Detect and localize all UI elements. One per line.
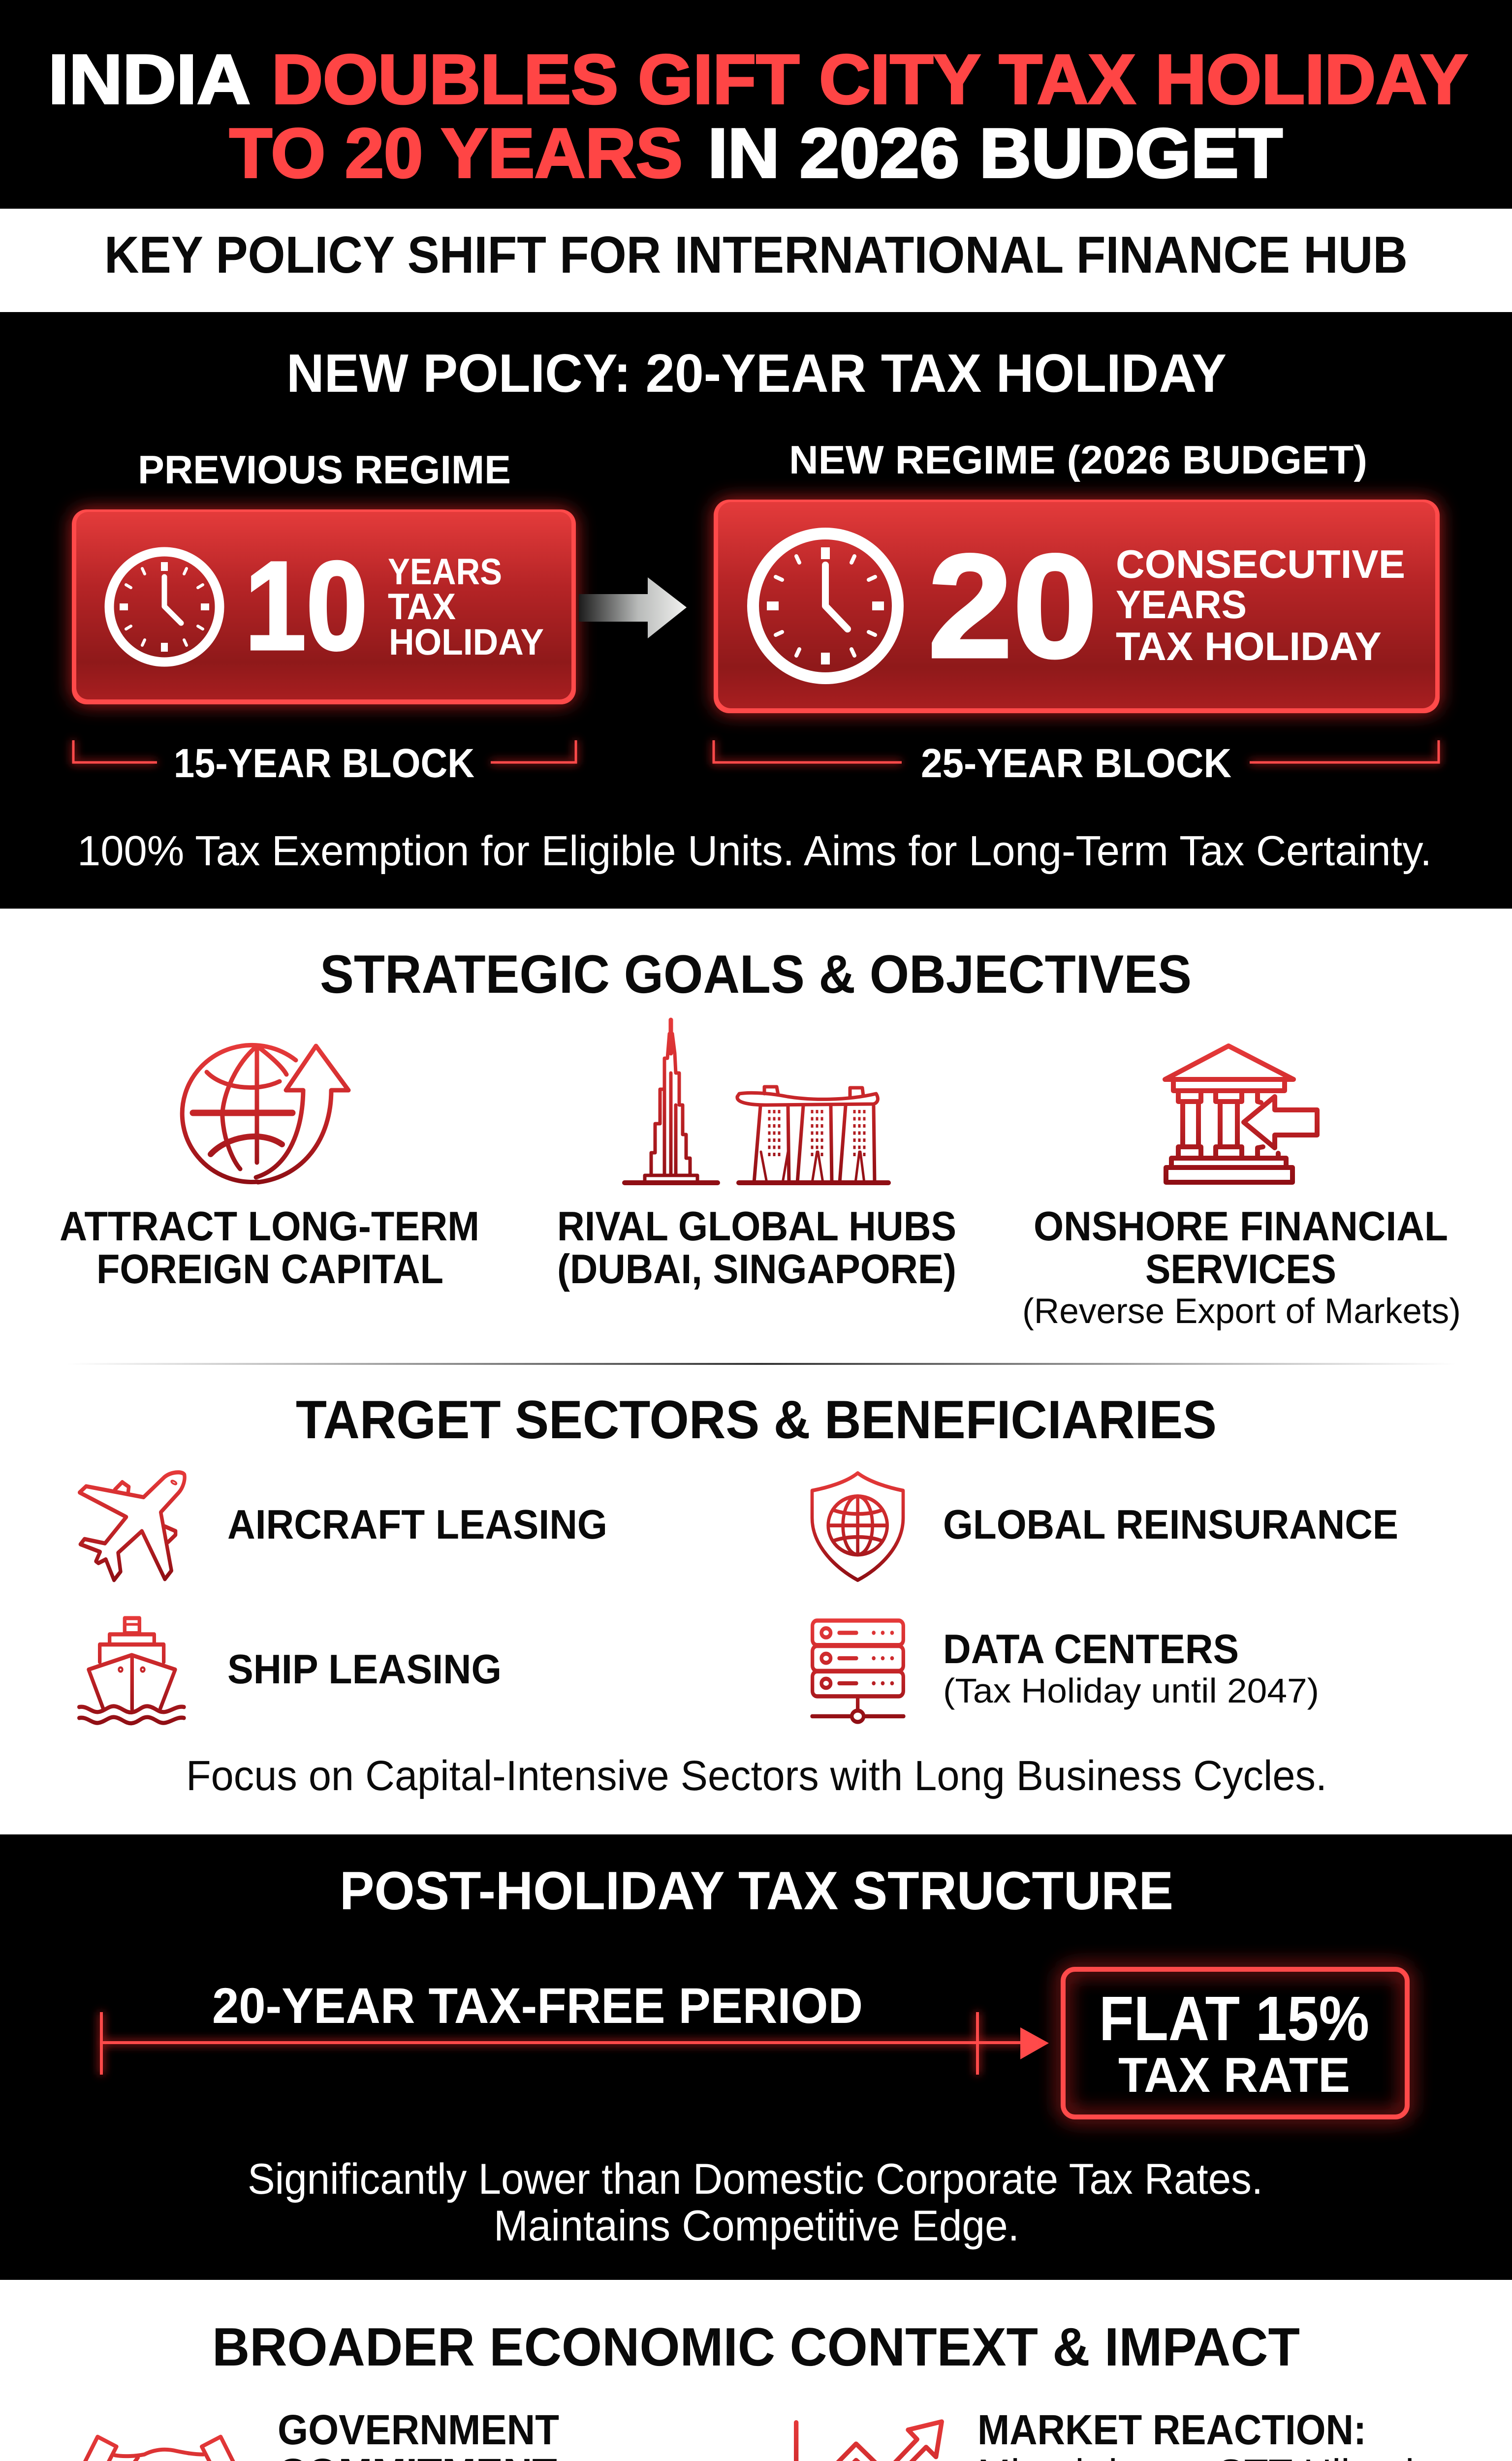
sector: data centers: DATA CENTERS [943,1626,1239,1672]
panel: post-holiday tax structure [0,1834,1512,2280]
sector: global reinsurance: GLOBAL REINSURANCE [943,1501,1398,1547]
text: consecutive years tax holiday [1116,542,1405,669]
icon: market chart [796,2422,946,2461]
callout: flat 15% tax rate [1063,1969,1407,2117]
caption: competitive edge: Maintains Competitive Edge. [494,2201,1019,2250]
goal: onshore services [1022,1203,1461,1331]
heading: new policy: NEW POLICY: 20-YEAR TAX HOLIDAY [286,343,1227,404]
caption: exemption: 100% Tax Exemption for Eligible Units. Aims for Long-Term Tax Certainty. [77,827,1432,875]
caption: competitive edge [248,2154,1263,2250]
bracket: 25-year block [714,740,1439,786]
goal: attract capital: FOREIGN CAPITAL [96,1246,443,1292]
icon: dubai and singapore towers [625,1020,888,1183]
heading: strategic goals: STRATEGIC GOALS & OBJECTIVES [320,944,1192,1005]
goal: onshore services: (Reverse Export of Markets) [1022,1292,1461,1331]
icon: bank with inward arrow [1165,1046,1317,1182]
label: tax-free period: 20-YEAR TAX-FREE PERIOD [212,1978,863,2034]
heading: target sectors: TARGET SECTORS & BENEFICIARIES [296,1389,1217,1450]
title: TO 20 YEARS [229,114,683,192]
title: IN 2026 BUDGET [708,114,1283,192]
icon: shield globe [812,1473,903,1580]
sector: data centers [943,1626,1319,1710]
callout: flat 15% tax rate: TAX RATE [1118,2048,1350,2103]
text: years tax holiday [388,551,544,663]
text: consecutive years tax holiday: CONSECUTIVE [1116,542,1405,587]
goal: rival hubs: (DUBAI, SINGAPORE) [557,1246,956,1292]
arrow: previous to new regime [579,577,687,638]
text: years tax holiday: TAX [388,586,456,627]
panel: goals and sectors [0,909,1512,1834]
bracket: 25-year block: 25-YEAR BLOCK [921,740,1231,786]
title: INDIA [48,40,251,119]
goal: attract capital [60,1203,479,1292]
number: 20: 20 [928,523,1098,689]
sector: aircraft leasing: AIRCRAFT LEASING [227,1501,607,1547]
label: new regime: NEW REGIME (2026 BUDGET) [789,438,1367,482]
text: consecutive years tax holiday: TAX HOLIDAY [1116,625,1382,669]
number: 10: 10 [245,536,368,676]
panel: new policy [0,312,1512,909]
icon: clock [109,552,220,662]
subtitle: KEY POLICY SHIFT FOR INTERNATIONAL FINANCE HUB [104,226,1408,284]
goal: rival hubs: RIVAL GLOBAL HUBS [557,1203,956,1249]
panel: header [0,0,1512,209]
heading: broader context: BROADER ECONOMIC CONTEXT & IMPACT [212,2317,1300,2377]
goal: onshore services: ONSHORE FINANCIAL [1034,1203,1448,1249]
heading: post-holiday: POST-HOLIDAY TAX STRUCTURE [340,1861,1173,1921]
icon: data server [812,1621,904,1722]
title: DOUBLES GIFT CITY TAX HOLIDAY [272,40,1468,119]
icon: handshake [68,2437,250,2461]
panel: subtitle band [0,209,1512,312]
card: previous regime 10 years [72,509,576,704]
sector: data centers: (Tax Holiday until 2047) [943,1672,1319,1710]
caption: competitive edge: Significantly Lower than Domestic Corporate Tax Rates. [248,2154,1263,2203]
panel: broader context [0,2280,1512,2461]
timeline arrow [101,2012,1049,2075]
goal: attract capital: ATTRACT LONG-TERM [60,1203,479,1249]
icon: ship [79,1618,184,1723]
icon: globe with arrow [182,1045,348,1182]
text: government commitment: GOVERNMENT [278,2406,559,2454]
sector: ship leasing: SHIP LEASING [227,1646,502,1692]
label: previous regime: PREVIOUS REGIME [138,448,511,492]
caption: focus: Focus on Capital-Intensive Sectors with Long Business Cycles. [186,1752,1327,1799]
icon: airplane [80,1472,185,1580]
title [48,40,1468,192]
bracket: 15-year block: 15-YEAR BLOCK [174,740,474,786]
text: consecutive years tax holiday: YEARS [1116,583,1247,627]
goal: onshore services: SERVICES [1145,1246,1336,1292]
text: market reaction: MARKET REACTION: [977,2406,1366,2454]
callout: flat 15% tax rate: FLAT 15% [1099,1984,1369,2054]
goal: rival hubs [557,1203,956,1292]
text: years tax holiday: HOLIDAY [389,621,544,663]
text: years tax holiday: YEARS [388,551,502,592]
icon: clock [753,534,898,678]
card: new regime 20 years [714,500,1440,713]
bracket: 15-year block [73,740,576,786]
